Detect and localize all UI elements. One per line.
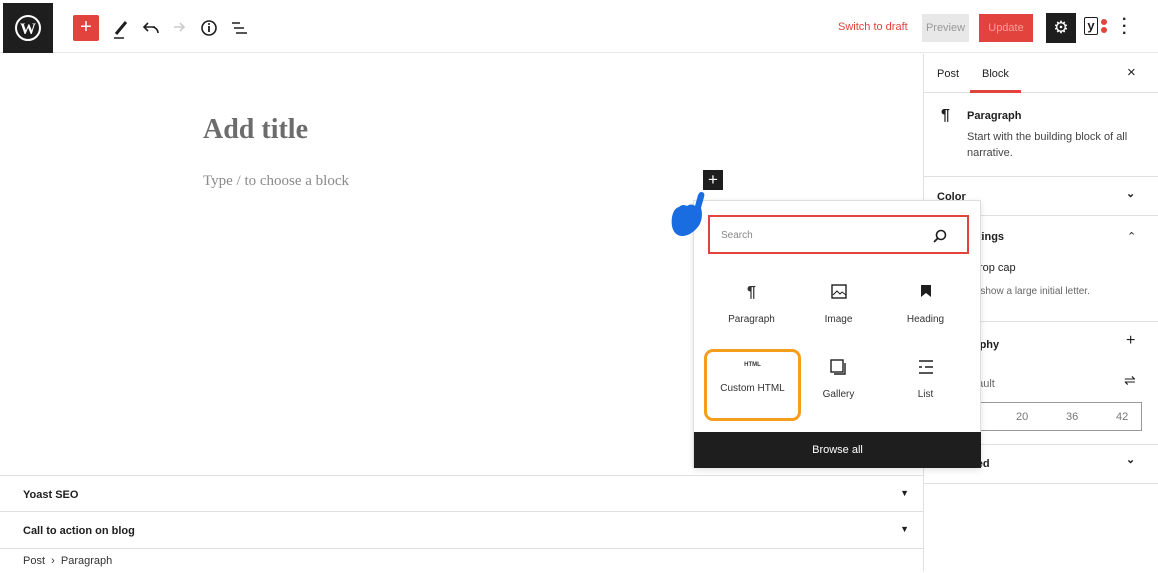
panel: color: Color: [937, 191, 966, 203]
icon: more menu: ·: [1122, 25, 1127, 42]
block: custom html (highlighted): HTML: [744, 362, 761, 368]
block info: [924, 93, 1158, 177]
toolbar icons: [114, 20, 247, 39]
editor canvas: [203, 114, 723, 190]
block: image: [825, 284, 852, 325]
panel: advanced: ⌄: [1126, 454, 1135, 466]
panel: typography: +: [1126, 332, 1135, 349]
panel: color: [924, 177, 1158, 216]
block: custom html (highlighted): [704, 349, 801, 421]
breadcrumb: Post › Paragraph: [23, 555, 112, 567]
sidebar tabs: ×: [1127, 64, 1136, 81]
icon: more menu: ·: [1122, 11, 1127, 28]
panel: call to action: Call to action on blog: [23, 525, 135, 537]
icon: settings: [1046, 13, 1076, 43]
panel: text settings: [924, 216, 1158, 322]
search field: Search: [721, 230, 753, 241]
icon: yoast: [1084, 17, 1107, 35]
block: paragraph: [728, 284, 775, 325]
panel: typography: 20: [1016, 411, 1028, 423]
block: gallery: Gallery: [823, 389, 854, 400]
panel: yoast seo: Yoast SEO: [23, 489, 78, 501]
browse all button: Browse all: [812, 444, 863, 456]
panel: yoast seo: ▼: [900, 488, 909, 498]
panel: advanced: Advanced: [937, 458, 990, 470]
block: heading: [907, 285, 944, 325]
preview button: [922, 14, 969, 42]
icon: inline plus: [703, 170, 723, 190]
block grid: [704, 284, 944, 421]
block: paragraph: ¶: [747, 284, 756, 301]
icon: yoast: y: [1087, 18, 1095, 33]
panel: typography: ⇌: [1124, 372, 1136, 388]
update button: [979, 14, 1033, 42]
block inserter popover: [693, 200, 981, 468]
sidebar tabs: Post: [937, 68, 959, 80]
block: gallery: [823, 359, 854, 400]
block info: Start with the building block of all narrative.: [967, 131, 1127, 159]
preview button: Preview: [926, 22, 965, 34]
panel: typography: [924, 322, 1158, 445]
panel: typography: Default: [960, 378, 995, 390]
icon: more menu: [1122, 11, 1127, 42]
icon: more menu: ·: [1122, 18, 1127, 35]
panel: typography: 42: [1116, 411, 1128, 423]
icon: add block button: +: [80, 16, 92, 38]
bottom meta panels: [0, 475, 923, 567]
icon: wordpress logo: [3, 3, 53, 53]
block: paragraph: Paragraph: [728, 314, 775, 325]
panel: advanced: [924, 445, 1158, 484]
panel: text settings: ⌃: [1127, 231, 1136, 243]
top toolbar: [0, 0, 1158, 53]
sidebar: [923, 54, 1158, 571]
search field: [708, 215, 969, 254]
browse all button: [694, 432, 981, 468]
panel: typography: 36: [1066, 411, 1078, 423]
panel: color: ⌄: [1126, 188, 1135, 200]
panel: yoast seo: [0, 475, 923, 512]
panel: text settings: Drop cap: [971, 262, 1016, 274]
update button: Update: [988, 22, 1024, 34]
block: list: [918, 360, 934, 400]
sidebar tabs: [924, 54, 1158, 93]
panel: call to action: [0, 512, 923, 549]
block info: Paragraph: [967, 110, 1021, 122]
icon: pointing hand: [672, 192, 704, 236]
panel: text settings: Toggle to show a large initial letter.: [937, 286, 1090, 297]
panel: text settings: Text settings: [937, 231, 1004, 243]
block: list: List: [918, 389, 933, 400]
panel: typography: Typography: [937, 339, 999, 351]
block: heading: Heading: [907, 314, 944, 325]
switch to draft link: Switch to draft: [838, 21, 908, 33]
icon: settings: ⚙: [1053, 18, 1069, 37]
block placeholder: Type / to choose a block: [203, 173, 349, 189]
icon: add block button: [73, 15, 99, 41]
title placeholder: Add title: [203, 114, 308, 145]
panel: call to action: ▼: [900, 524, 909, 534]
icon: inline plus: +: [708, 170, 718, 189]
icon: wordpress logo: W: [20, 21, 36, 38]
block: custom html (highlighted): Custom HTML: [720, 383, 785, 394]
block: image: Image: [825, 314, 852, 325]
block info: ¶: [941, 107, 950, 124]
sidebar tabs: Block: [982, 68, 1009, 80]
